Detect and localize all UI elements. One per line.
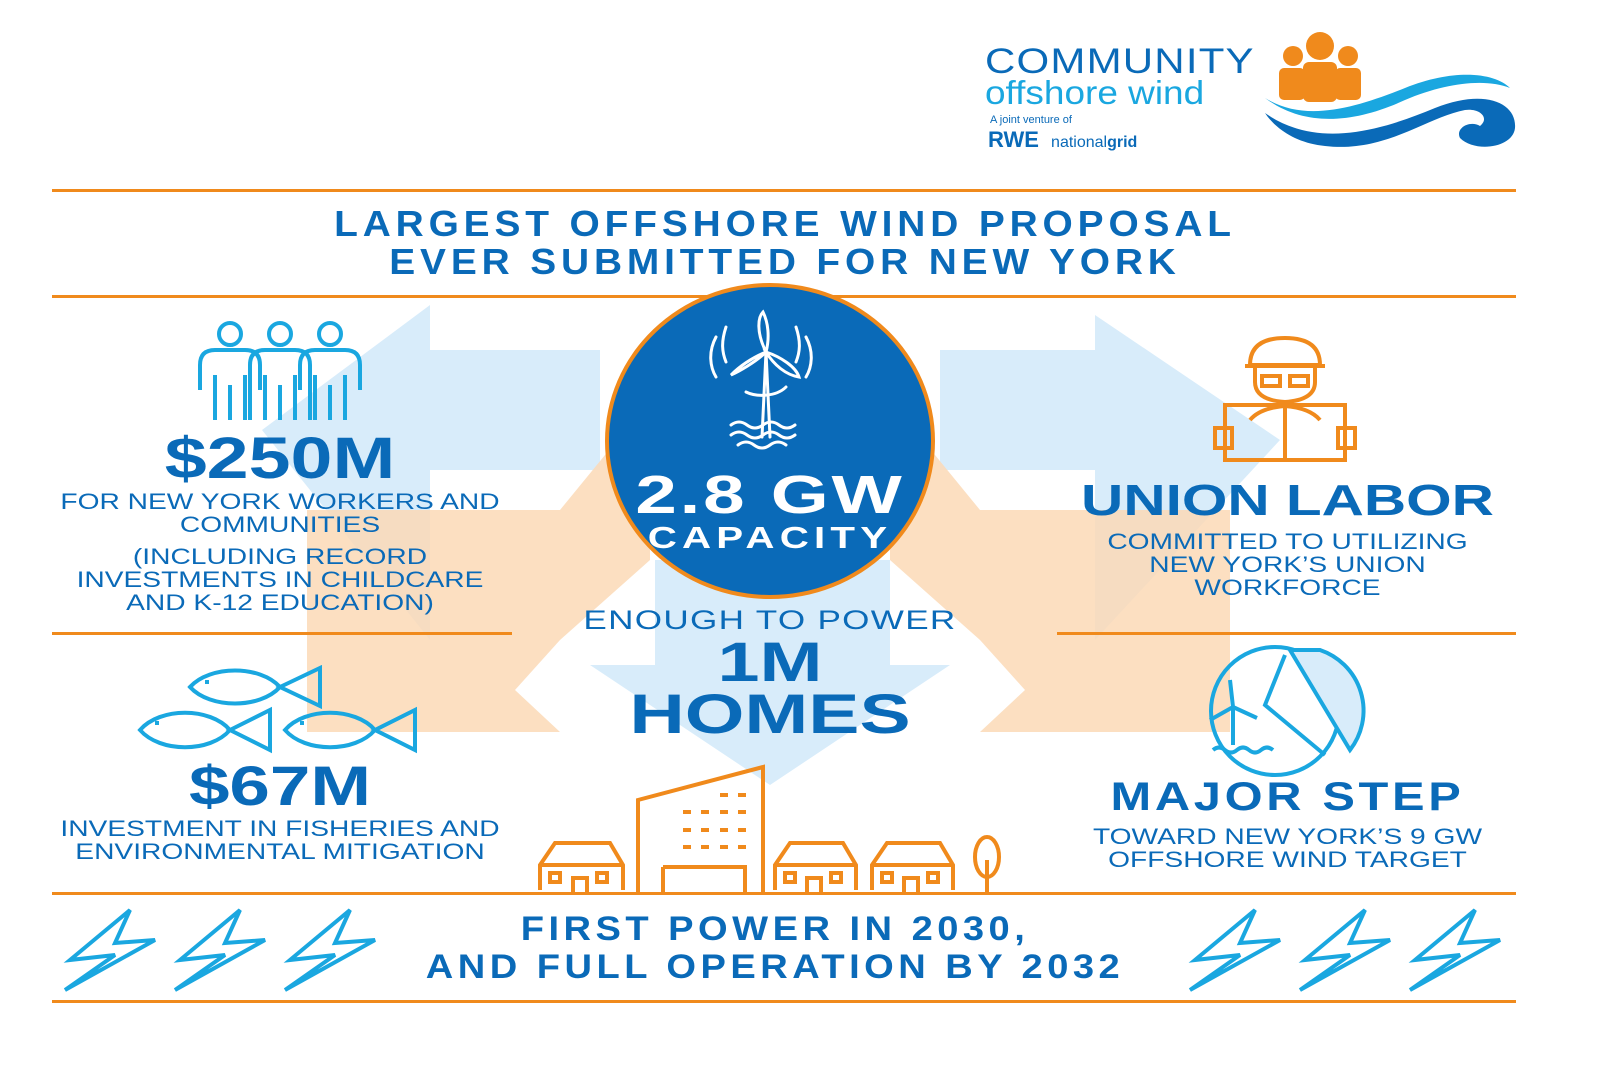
icons: lightning bolts left — [64, 908, 376, 992]
footer text: FIRST POWER IN 2030, — [521, 910, 1029, 948]
description: WORKFORCE — [1194, 575, 1381, 600]
icon: people — [198, 321, 362, 420]
panel: $250M workers: AND K-12 EDUCATION) — [126, 590, 434, 615]
logo — [985, 32, 1516, 152]
panel: $67M fisheries — [60, 665, 500, 864]
logo: RWE nationalgrid — [988, 127, 1137, 152]
enough to power 1M homes: ENOUGH TO POWER — [583, 605, 957, 635]
panel: major step — [1093, 645, 1482, 872]
icon: turbine pie chart — [1209, 645, 1366, 777]
logo: offshore wind — [985, 74, 1204, 111]
amount: $250M — [165, 426, 395, 491]
description: TOWARD NEW YORK’S 9 GW — [1093, 824, 1482, 849]
title: LARGEST OFFSHORE WIND PROPOSAL — [334, 203, 1236, 244]
description: NEW YORK’S UNION — [1149, 552, 1426, 577]
panel: $250M workers: (INCLUDING RECORD — [133, 544, 427, 569]
heading: UNION LABOR — [1081, 476, 1494, 525]
icons: lightning bolts right — [1188, 908, 1501, 992]
logo: A joint venture of — [990, 114, 1072, 126]
logo text: COMMUNITY — [985, 42, 1255, 81]
description: COMMUNITIES — [180, 512, 380, 537]
description — [60, 816, 500, 864]
footer text — [426, 910, 1124, 986]
icon: offshore turbine — [709, 310, 813, 450]
footer text: AND FULL OPERATION BY 2032 — [426, 948, 1124, 986]
description — [1107, 529, 1468, 600]
description — [60, 489, 500, 537]
description: OFFSHORE WIND TARGET — [1108, 847, 1467, 872]
capacity text: 2.8 GW — [635, 465, 905, 525]
title — [334, 203, 1236, 282]
icon: worker reading — [1213, 336, 1357, 462]
description: ENVIRONMENTAL MITIGATION — [75, 839, 485, 864]
panel: $250M workers — [60, 321, 500, 615]
enough to power 1M homes: 1M — [717, 630, 823, 693]
description — [1093, 824, 1482, 872]
description: FOR NEW YORK WORKERS AND — [60, 489, 500, 514]
icon: fish — [137, 665, 417, 754]
enough to power 1M homes: HOMES — [629, 682, 911, 745]
heading: MAJOR STEP — [1111, 775, 1464, 819]
title: EVER SUBMITTED FOR NEW YORK — [389, 241, 1181, 282]
description: INVESTMENT IN FISHERIES AND — [60, 816, 500, 841]
enough to power 1M homes — [583, 605, 957, 745]
description: COMMITTED TO UTILIZING — [1107, 529, 1468, 554]
center circle: 2.8 GW capacity — [605, 283, 935, 599]
panel: union labor — [1081, 336, 1494, 600]
center circle: 2.8 GW capacity: CAPACITY — [648, 520, 892, 555]
panel: $250M workers: INVESTMENTS IN CHILDCARE — [77, 567, 483, 592]
logo icon: people and waves — [1265, 32, 1516, 147]
icon: buildings — [538, 764, 1001, 892]
amount: $67M — [189, 754, 371, 817]
